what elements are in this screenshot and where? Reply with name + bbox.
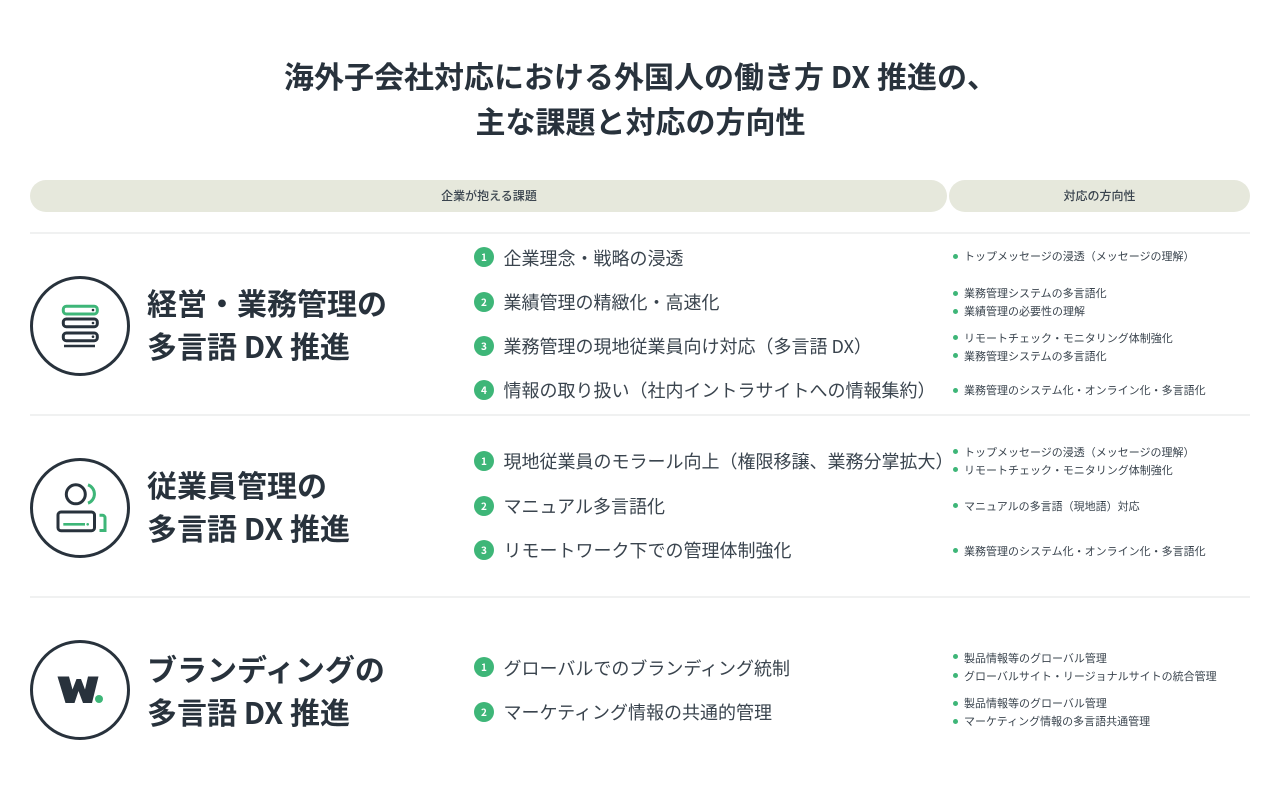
notes 1b: グローバルサイト・リージョナルサイトの統合管理 bbox=[964, 668, 1217, 684]
heading: employee management bbox=[147, 462, 350, 549]
item 2: マニュアル多言語化 bbox=[504, 493, 665, 519]
notes 3a: リモートチェック・モニタリング体制強化 bbox=[964, 330, 1173, 346]
item 2: 2 bbox=[481, 294, 487, 309]
notes 3: 業務管理のシステム化・オンライン化・多言語化 bbox=[964, 543, 1206, 559]
item 4: 情報の取り扱い（社内イントラサイトへの情報集約） bbox=[504, 377, 936, 403]
item 3: 3 bbox=[481, 338, 487, 353]
heading: business management: 多言語 DX 推進 bbox=[147, 323, 350, 367]
item 4: 4 bbox=[481, 382, 487, 397]
notes 2a: 業務管理システムの多言語化 bbox=[964, 285, 1107, 301]
item 1: 現地従業員のモラール向上（権限移譲、業務分掌拡大） bbox=[504, 448, 954, 474]
notes 4: 業務管理のシステム化・オンライン化・多言語化 bbox=[964, 382, 1206, 398]
title bbox=[284, 53, 997, 142]
item 3: 3 bbox=[481, 542, 487, 557]
header: response direction bbox=[949, 180, 1250, 212]
item 1: グローバルでのブランディング統制 bbox=[504, 655, 790, 681]
icon: person and card bbox=[30, 458, 130, 558]
item 1: 1 bbox=[481, 249, 487, 264]
notes 1a: トップメッセージの浸透（メッセージの理解） bbox=[964, 444, 1195, 460]
item 1: 企業理念・戦略の浸透 bbox=[504, 245, 684, 271]
icon: server stack bbox=[30, 276, 130, 376]
header: response direction: 対応の方向性 bbox=[1063, 187, 1136, 204]
notes 3b: 業務管理システムの多言語化 bbox=[964, 348, 1107, 364]
heading: branding: 多言語 DX 推進 bbox=[147, 689, 350, 733]
notes 1b: リモートチェック・モニタリング体制強化 bbox=[964, 462, 1173, 478]
title: 海外子会社対応における外国人の働き方 DX 推進の、 bbox=[284, 53, 997, 97]
item 3: 業務管理の現地従業員向け対応（多言語 DX） bbox=[504, 333, 872, 359]
item 2: 2 bbox=[481, 498, 487, 513]
icon: w logo bbox=[30, 640, 130, 740]
item 3: リモートワーク下での管理体制強化 bbox=[504, 537, 792, 563]
item 2: マーケティング情報の共通的管理 bbox=[504, 699, 772, 725]
item 1: 1 bbox=[481, 659, 487, 674]
heading: business management: 経営・業務管理の bbox=[147, 280, 387, 324]
notes 1: トップメッセージの浸透（メッセージの理解） bbox=[964, 248, 1195, 264]
heading: employee management: 多言語 DX 推進 bbox=[147, 505, 350, 549]
heading: employee management: 従業員管理の bbox=[147, 462, 327, 506]
title: 主な課題と対応の方向性 bbox=[476, 98, 806, 142]
notes 2a: 製品情報等のグローバル管理 bbox=[964, 695, 1107, 711]
notes 2b: マーケティング情報の多言語共通管理 bbox=[964, 713, 1150, 729]
panel: business management bbox=[30, 245, 1206, 403]
heading: branding bbox=[147, 646, 385, 733]
item 2: 業績管理の精緻化・高速化 bbox=[504, 289, 720, 315]
notes 2: マニュアルの多言語（現地語）対応 bbox=[964, 498, 1140, 514]
panel: branding bbox=[30, 640, 1217, 740]
item 2: 2 bbox=[481, 704, 487, 719]
panel: employee management bbox=[30, 444, 1206, 563]
item 1: 1 bbox=[481, 453, 487, 468]
notes 2b: 業績管理の必要性の理解 bbox=[964, 303, 1085, 319]
heading: business management bbox=[147, 280, 387, 367]
notes 1a: 製品情報等のグローバル管理 bbox=[964, 650, 1107, 666]
header: company challenges: 企業が抱える課題 bbox=[441, 187, 537, 204]
header: company challenges bbox=[30, 180, 947, 212]
heading: branding: ブランディングの bbox=[147, 646, 385, 690]
